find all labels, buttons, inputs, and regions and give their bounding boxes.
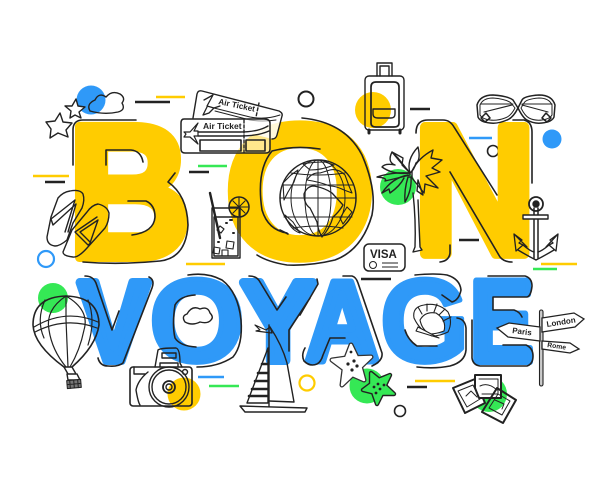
icon: air tickets	[181, 91, 282, 153]
icon: starfish	[332, 345, 394, 404]
decorative circles and dashes	[33, 86, 577, 416]
title: VOYAGE	[79, 255, 534, 387]
icon: camera	[130, 348, 192, 407]
icon: globe	[280, 160, 356, 237]
white starfish	[332, 345, 371, 385]
title: VOYAGE: Y	[241, 258, 315, 385]
title: VOYAGE: E	[470, 256, 534, 387]
icon: signpost: Rome	[547, 342, 567, 352]
icon: sailboat	[240, 325, 307, 412]
title: BON: B	[68, 86, 191, 298]
title: VOYAGE: G	[380, 255, 469, 387]
icon: cocktail	[210, 193, 249, 258]
green starfish	[363, 373, 394, 404]
icon: cloud inside O	[183, 308, 212, 324]
icon: photos	[453, 375, 516, 423]
title: BON: O	[223, 84, 377, 299]
front ticket: Air Ticket	[203, 121, 242, 131]
letter outlines	[73, 118, 533, 368]
title: VOYAGE: A	[306, 258, 379, 385]
icon: stars	[46, 99, 85, 138]
title: BON: N	[414, 89, 536, 293]
icon: hot air balloon	[33, 296, 99, 389]
back ticket: Air Ticket	[218, 97, 256, 114]
icon: flip flops	[47, 190, 109, 257]
icon: scallop shell	[414, 304, 451, 338]
icon: signpost: Paris	[512, 326, 533, 337]
icon: cloud	[89, 93, 124, 113]
title: BON	[68, 84, 536, 299]
icon: palm tree	[377, 147, 442, 252]
icon: visa card: VISA	[370, 249, 397, 261]
icon: suitcase	[365, 63, 404, 133]
icon: signpost	[497, 310, 584, 386]
title: VOYAGE: V	[79, 260, 149, 385]
icon: signpost: London	[546, 315, 576, 329]
icon: sunglasses	[477, 95, 555, 123]
icon: anchor	[514, 197, 558, 260]
title: VOYAGE: O	[149, 256, 245, 387]
icon: visa card	[364, 244, 405, 271]
